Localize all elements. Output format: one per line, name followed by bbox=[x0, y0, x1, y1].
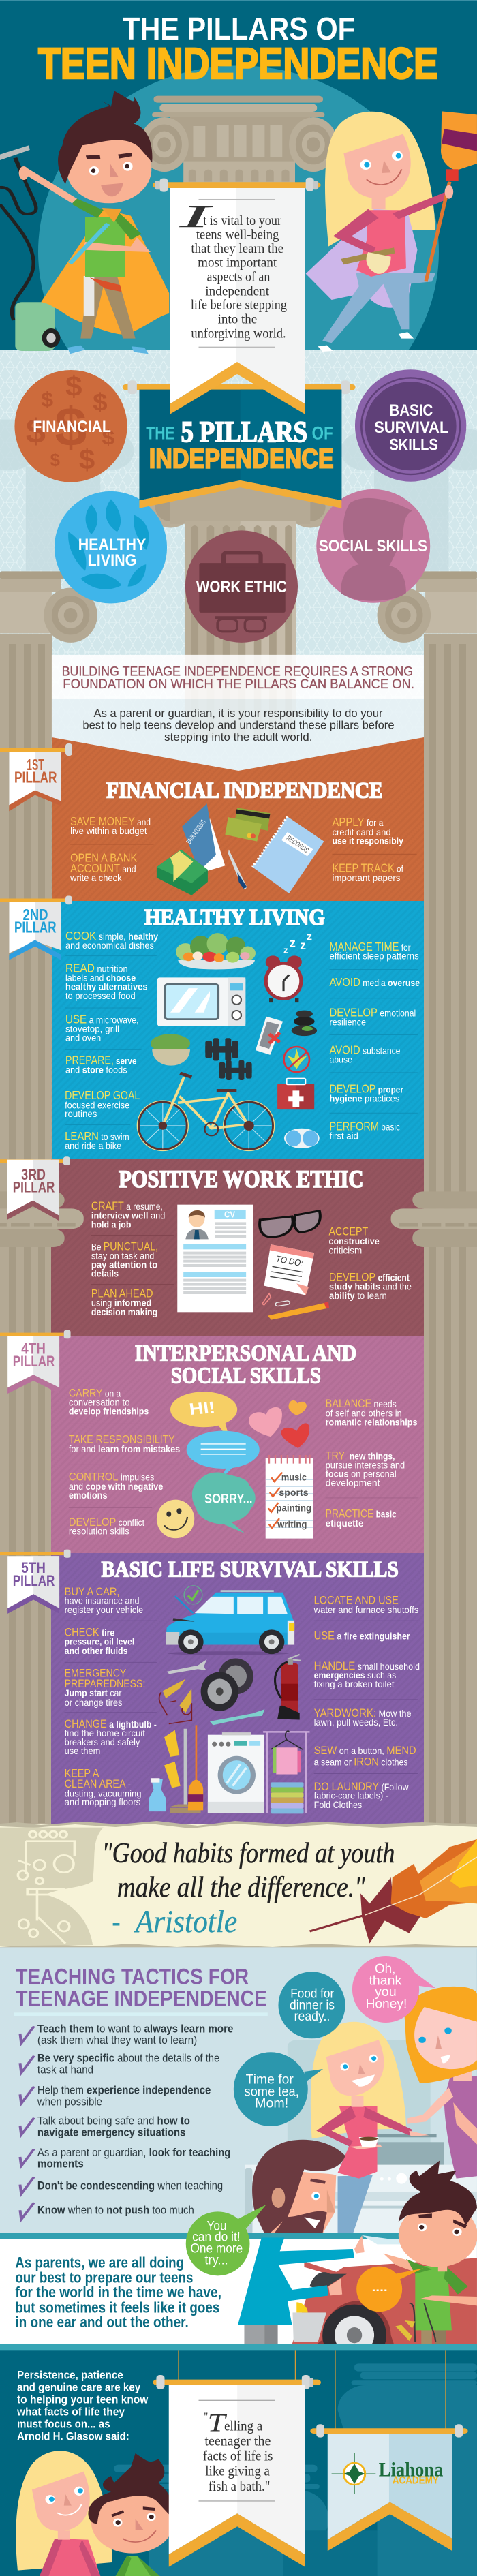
work ethic tips left: hold a job bbox=[91, 1219, 131, 1230]
ribbon: 2nd pillar: 2ND bbox=[22, 906, 48, 924]
pillar circle: financial: FINANCIAL bbox=[33, 418, 111, 436]
survival tips left: PREPAREDNESS: bbox=[65, 1677, 145, 1690]
teaching tactics checklist: Talk about being safe and how to bbox=[37, 2115, 190, 2128]
work ethic tips right: constructive bbox=[329, 1236, 380, 1246]
pillar circle: healthy living: HEALTHY bbox=[78, 536, 146, 554]
speech bubble: you can do it: can do it! bbox=[192, 2229, 241, 2244]
illustration: glasses, to-do note, clips, pencil bbox=[260, 1211, 329, 1320]
survival tips right: emergencies such as bbox=[314, 1670, 396, 1681]
healthy living tips left: and economical dishes bbox=[65, 940, 154, 951]
survival tips left: CHANGE a lightbulb - bbox=[65, 1717, 157, 1730]
banner: the 5 pillars of independence: OF bbox=[312, 423, 333, 444]
work ethic tips right: ACCEPT bbox=[329, 1225, 368, 1238]
healthy living tips right bbox=[329, 940, 420, 1141]
illustration: interests checklist: writing bbox=[277, 1519, 307, 1530]
social tips right: pursue interests and bbox=[326, 1460, 405, 1471]
character: mother bbox=[405, 1987, 477, 2179]
survival tips left: EMERGENCY bbox=[65, 1667, 126, 1679]
speech bubbles: some tea, bbox=[244, 2084, 299, 2099]
speech bubble: you can do it: One more bbox=[190, 2241, 243, 2256]
text: persistence bbox=[16, 2369, 149, 2443]
banner: Arnold Glasow quote: T bbox=[207, 2409, 227, 2437]
text: persistence: to helping your teen know bbox=[17, 2393, 149, 2406]
healthy living tips left: routines bbox=[65, 1109, 97, 1120]
illustration: first aid kit and goggles bbox=[277, 1079, 320, 1148]
title: THE PILLARS OF bbox=[123, 11, 355, 46]
social tips right: development bbox=[326, 1477, 380, 1488]
social tips right: focus on personal bbox=[326, 1469, 397, 1479]
healthy living tips right: MANAGE TIME for bbox=[329, 940, 411, 953]
financial tips left: SAVE MONEY and bbox=[70, 814, 151, 828]
text: persistence: Arnold H. Glasow said: bbox=[17, 2430, 129, 2443]
intro scroll banner with text: unforgiving world. bbox=[191, 326, 286, 341]
illustration: phone, stones, no drugs sign bbox=[256, 1011, 317, 1072]
survival tips left: CHECK tire bbox=[65, 1625, 114, 1638]
heading: interpersonal and social skills: SOCIAL SKILLS bbox=[171, 1362, 321, 1388]
illustration: CV document: CV bbox=[224, 1210, 235, 1220]
social tips right bbox=[326, 1398, 418, 1529]
heading: teaching tactics bbox=[14, 1965, 268, 2016]
ribbon: 4th pillar: 4TH bbox=[21, 1340, 46, 1358]
pillar circle: financial: $ bbox=[50, 450, 60, 470]
banner: the 5 pillars of independence: INDEPENDENCE bbox=[149, 444, 334, 474]
pillar circle: social skills: SOCIAL SKILLS bbox=[319, 538, 427, 555]
foundation text block bbox=[52, 655, 424, 785]
top pillar capital bbox=[140, 96, 338, 183]
work ethic tips left bbox=[91, 1200, 174, 1317]
pillar circle: financial: $ bbox=[93, 388, 108, 416]
healthy living tips right: PERFORM basic bbox=[329, 1120, 400, 1133]
financial tips right: credit card and bbox=[332, 827, 391, 838]
faded background columns bbox=[0, 420, 477, 571]
illustration: alarm clock and sleep z's: z bbox=[300, 938, 306, 952]
quote: Aristotle: make all the difference." bbox=[117, 1872, 365, 1903]
ribbon: 5th pillar: PILLAR bbox=[13, 1572, 55, 1589]
speech bubbles: you bbox=[375, 1984, 397, 1999]
survival tips right: water and furnace shutoffs bbox=[313, 1606, 418, 1616]
pillar circle: basic survival skills bbox=[355, 369, 466, 482]
illustration: speech bubbles and smiley: HI! bbox=[188, 1398, 217, 1419]
survival tips right: USE a fire extinguisher bbox=[314, 1629, 410, 1642]
illustration: alarm clock and sleep z's: z bbox=[283, 946, 288, 955]
social tips left: for and learn from mistakes bbox=[69, 1443, 180, 1454]
character: boy with vacuum and cape bbox=[0, 91, 169, 354]
teaching tactics checklist: (ask them what they want to learn) bbox=[37, 2034, 197, 2046]
survival tips left: or change tires bbox=[65, 1698, 123, 1708]
illustration: microwave bbox=[157, 977, 245, 1026]
ribbon: 5th pillar: 5TH bbox=[21, 1560, 46, 1577]
heading: positive work ethic: POSITIVE WORK ETHIC bbox=[119, 1166, 363, 1193]
illustration: alarm clock and sleep z's bbox=[264, 931, 312, 1002]
intro scroll banner with text: life before stepping bbox=[191, 297, 287, 312]
social tips right: romantic relationships bbox=[326, 1417, 417, 1428]
social tips right: BALANCE needs bbox=[326, 1398, 397, 1410]
speech bubbles: Food for bbox=[290, 1986, 334, 2001]
banner: Arnold Glasow quote bbox=[153, 2350, 321, 2567]
character: father bbox=[252, 2140, 345, 2234]
speech bubble: you can do it: try... bbox=[204, 2252, 228, 2267]
center pillar bbox=[148, 480, 333, 738]
healthy living tips left: stovetop, grill bbox=[65, 1024, 119, 1034]
pillar circle: basic survival skills: BASIC bbox=[389, 402, 433, 419]
teaching tactics checklist: As a parent or guardian, look for teaching bbox=[37, 2147, 230, 2159]
work ethic tips left: stay on task and bbox=[91, 1251, 154, 1261]
social tips left: TAKE RESPONSIBILITY bbox=[69, 1433, 175, 1446]
intro scroll banner with text: into the bbox=[218, 311, 257, 326]
survival tips right: fixing a broken toilet bbox=[314, 1680, 395, 1690]
heading: financial independence: FINANCIAL INDEPENDENCE bbox=[106, 778, 383, 803]
teaching tactics checklist: moments bbox=[37, 2158, 84, 2171]
illustration: interests checklist: sports bbox=[279, 1487, 309, 1498]
illustration: red car with boy and father bbox=[238, 2235, 477, 2366]
healthy living tips right: first aid bbox=[329, 1131, 358, 1141]
foundation text block: As a parent or guardian, it is your responsibility to do your bbox=[93, 707, 383, 720]
pillar circle: financial: $ bbox=[79, 444, 95, 476]
character: girl with broom and oven mitt bbox=[306, 111, 477, 352]
healthy living tips left: to processed food bbox=[65, 991, 136, 1002]
intro scroll banner with text bbox=[170, 188, 305, 414]
work ethic tips left: decision making bbox=[91, 1306, 157, 1317]
illustration: speech bubbles and smiley bbox=[157, 1392, 260, 1538]
pillar circle: healthy living bbox=[55, 491, 167, 603]
survival tips right: HANDLE small household bbox=[314, 1659, 420, 1672]
pillar circle: healthy living: LIVING bbox=[88, 552, 136, 570]
text: as parents: for the world in the time we have, bbox=[15, 2284, 221, 2301]
text: as parents bbox=[15, 2254, 221, 2331]
survival tips right: YARDWORK: Mow the bbox=[314, 1706, 412, 1719]
title bbox=[38, 11, 438, 88]
speech bubbles: Time for bbox=[246, 2072, 294, 2087]
ribbon: 5th pillar bbox=[0, 1550, 71, 1614]
survival tips left: and other fluids bbox=[65, 1646, 128, 1656]
pillar circle: basic survival skills: SKILLS bbox=[389, 436, 438, 454]
work ethic tips left: CRAFT a resume, bbox=[91, 1200, 163, 1212]
teaching tactics checklist bbox=[20, 2023, 233, 2220]
heading: healthy living: HEALTHY LIVING bbox=[144, 904, 325, 930]
icon: head silhouette with gears bbox=[0, 1828, 104, 1946]
healthy living tips left: and oven bbox=[65, 1032, 101, 1043]
teaching tactics checklist: navigate emergency situations bbox=[37, 2126, 185, 2139]
social tips right: TRY new things, bbox=[326, 1450, 395, 1462]
work ethic tips left: interview well and bbox=[91, 1210, 165, 1221]
healthy living tips left: PREPARE, serve bbox=[65, 1054, 136, 1067]
social tips left: resolution skills bbox=[69, 1526, 129, 1537]
banner: Arnold Glasow quote: elling a bbox=[224, 2419, 262, 2434]
ribbon: 4th pillar bbox=[0, 1330, 71, 1394]
healthy living tips right: efficient sleep patterns bbox=[329, 951, 419, 962]
speech bubbles bbox=[234, 1956, 435, 2126]
healthy living tips left bbox=[65, 929, 159, 1152]
work ethic tips right bbox=[329, 1225, 412, 1301]
healthy living tips left: COOK simple, healthy bbox=[65, 929, 159, 942]
healthy living tips left: READ nutrition bbox=[65, 961, 127, 975]
healthy living tips left: healthy alternatives bbox=[65, 981, 148, 992]
foundation text block: FOUNDATION ON WHICH THE PILLARS CAN BALANCE ON. bbox=[63, 677, 414, 691]
top scroll rod bbox=[153, 178, 321, 192]
pillar circle: work ethic: WORK ETHIC bbox=[196, 579, 287, 596]
financial tips right: use it responsibly bbox=[332, 835, 403, 846]
quote: Aristotle: Aristotle bbox=[133, 1904, 237, 1939]
healthy living tips left: LEARN to swim bbox=[65, 1129, 129, 1143]
text: persistence: and genuine care are key bbox=[17, 2381, 141, 2394]
illustration: red car with boy and father: .... bbox=[372, 2282, 388, 2294]
teaching tactics checklist: Teach them to want to always learn more bbox=[37, 2023, 233, 2036]
text: as parents: but sometimes it feels like it goes bbox=[15, 2299, 219, 2316]
financial tips right bbox=[332, 815, 417, 884]
intro scroll banner with text: most important bbox=[198, 256, 277, 271]
healthy living tips right: AVOID substance bbox=[329, 1043, 400, 1056]
illustration: bank book, cash, cards, records bbox=[157, 803, 324, 895]
survival tips right bbox=[313, 1594, 420, 1810]
illustration: alarm clock and sleep z's: z bbox=[307, 931, 312, 942]
third pillar capital overlays bbox=[0, 1191, 477, 1247]
quote: Aristotle bbox=[102, 1838, 395, 1939]
work ethic tips left: pay attention to bbox=[91, 1259, 157, 1270]
survival tips left: register your vehicle bbox=[65, 1606, 143, 1616]
teaching tactics checklist: Help them experience independence bbox=[37, 2084, 211, 2097]
social tips left: develop friendships bbox=[69, 1406, 149, 1417]
banner: Arnold Glasow quote: facts of life is bbox=[203, 2449, 273, 2464]
social tips left: emotions bbox=[69, 1490, 108, 1501]
banner: Liahona Academy logo bbox=[310, 2350, 468, 2551]
survival tips right: a seam or IRON clothes bbox=[314, 1755, 408, 1768]
foundation text block: stepping into the adult world. bbox=[164, 731, 312, 743]
survival tips right: SEW on a button, MEND bbox=[314, 1744, 416, 1757]
speech bubble: you can do it: You bbox=[207, 2218, 227, 2233]
text: persistence: must focus on... as bbox=[17, 2418, 110, 2431]
speech bubble: you can do it bbox=[186, 2205, 266, 2275]
illustration: car with raised hood bbox=[166, 1586, 294, 1655]
illustration: interests checklist: painting bbox=[276, 1503, 311, 1514]
survival tips left: and mopping floors bbox=[65, 1798, 140, 1808]
illustration: salad bowl and dumbbells bbox=[151, 1034, 252, 1080]
pillar circle: financial: $ bbox=[65, 370, 82, 402]
speech bubbles: Mom! bbox=[255, 2096, 288, 2111]
work ethic tips right: DEVELOP efficient bbox=[329, 1271, 410, 1284]
teaching tactics checklist: task at hand bbox=[37, 2064, 93, 2076]
text: as parents: As parents, we are all doing bbox=[15, 2254, 184, 2271]
illustration: bank book, cash, cards, records: RECORDS bbox=[285, 835, 310, 855]
pillar circle: financial: $ bbox=[41, 388, 54, 412]
healthy living tips right: AVOID media overuse bbox=[329, 975, 420, 989]
financial tips right: APPLY for a bbox=[332, 815, 384, 829]
survival tips left bbox=[65, 1585, 157, 1808]
text: as parents: in one ear and out the other. bbox=[15, 2314, 189, 2331]
pillar circle: financial: $ bbox=[102, 426, 115, 449]
intro scroll banner with text: independent bbox=[205, 283, 269, 298]
survival tips left: dusting, vacuuming bbox=[65, 1789, 142, 1799]
financial tips left bbox=[70, 814, 153, 884]
speech bubbles: dinner is bbox=[290, 1997, 335, 2012]
pillar circle: social skills bbox=[316, 489, 430, 603]
work ethic tips right: study habits and the bbox=[329, 1281, 412, 1292]
ribbon: 2nd pillar: PILLAR bbox=[14, 919, 57, 936]
footer background bbox=[0, 2344, 477, 2576]
banner: Liahona Academy logo: Liahona bbox=[379, 2459, 443, 2481]
survival tips left: use them bbox=[65, 1747, 100, 1757]
teaching section background with kitchen bbox=[0, 1947, 477, 2234]
banner: Arnold Glasow quote: " bbox=[204, 2410, 208, 2423]
healthy living tips right: hygiene practices bbox=[329, 1093, 399, 1104]
healthy living tips left: DEVELOP GOAL bbox=[65, 1088, 140, 1102]
survival tips left: BUY A CAR, bbox=[65, 1585, 119, 1598]
patterned background bbox=[0, 350, 477, 1828]
teaching tactics checklist: Don't be condescending when teaching bbox=[37, 2179, 223, 2192]
illustration: bank book, cash, cards, records: BANK ACCOUNT bbox=[185, 818, 208, 845]
foundation text block: best to help teens develop and understand these pillars before bbox=[82, 719, 395, 731]
pillar circle: work ethic bbox=[185, 530, 298, 643]
healthy living tips left: USE a microwave, bbox=[65, 1013, 139, 1026]
financial tips left: write a check bbox=[70, 873, 122, 884]
survival tips left: KEEP A bbox=[65, 1766, 99, 1779]
work ethic tips left: details bbox=[91, 1268, 119, 1279]
social tips left: conversation to bbox=[69, 1397, 130, 1408]
illustration: hearts bbox=[249, 1400, 309, 1448]
healthy living tips right: DEVELOP emotional bbox=[329, 1006, 416, 1019]
character: boy head bbox=[399, 2161, 477, 2271]
survival tips left: breakers and safely bbox=[65, 1738, 140, 1748]
character: daughter with teacup bbox=[311, 2022, 429, 2234]
banner: Arnold Glasow quote: teenager the bbox=[204, 2434, 271, 2449]
ribbon: 1st pillar: PILLAR bbox=[14, 769, 57, 786]
social tips left: and cope with negative bbox=[69, 1481, 163, 1492]
heading: teaching tactics: TEACHING TACTICS FOR bbox=[16, 1965, 249, 1989]
work ethic tips left: PLAN AHEAD bbox=[91, 1287, 153, 1300]
intro scroll banner with text: aspects of an bbox=[207, 270, 271, 285]
financial tips left: ACCOUNT and bbox=[70, 861, 136, 875]
teaching tactics checklist: Know when to not push too much bbox=[37, 2204, 194, 2217]
survival tips right: Fold Clothes bbox=[314, 1800, 362, 1810]
financial tips right: KEEP TRACK of bbox=[332, 861, 404, 874]
ribbon: 4th pillar: PILLAR bbox=[13, 1353, 55, 1370]
ribbon: 1st pillar bbox=[0, 743, 72, 811]
social tips left: CONTROL impulses bbox=[69, 1471, 154, 1484]
social tips left: DEVELOP conflict bbox=[69, 1516, 144, 1529]
teaching tactics checklist: when possible bbox=[37, 2096, 102, 2109]
heading: interpersonal and social skills: INTERPERSONAL AND bbox=[135, 1340, 356, 1366]
healthy living tips right: abuse bbox=[329, 1054, 352, 1065]
intro scroll banner with text: that they learn the bbox=[191, 241, 283, 256]
text: persistence: what facts of life they bbox=[16, 2406, 125, 2419]
banner: Liahona Academy logo: ACADEMY bbox=[393, 2474, 439, 2486]
heading: teaching tactics: TEENAGE INDEPENDENCE bbox=[16, 1987, 267, 2011]
banner: the 5 pillars of independence: THE bbox=[146, 423, 175, 444]
healthy living tips left: labels and choose bbox=[65, 972, 136, 983]
speech bubbles: ready.. bbox=[294, 2008, 330, 2023]
financial tips right: important papers bbox=[332, 873, 401, 884]
work ethic tips right: criticism bbox=[329, 1245, 362, 1256]
pillar circle: financial bbox=[14, 370, 127, 482]
survival tips left: pressure, oil level bbox=[65, 1637, 134, 1647]
financial tips left: live within a budget bbox=[70, 826, 147, 837]
healthy living tips right: resilience bbox=[329, 1017, 366, 1028]
ribbon: 1st pillar: 1ST bbox=[27, 756, 44, 774]
pillar circle: financial: $ bbox=[55, 396, 87, 457]
healthy living tips left: and ride a bike bbox=[65, 1141, 121, 1152]
survival tips right: lawn, pull weeds, Etc. bbox=[314, 1718, 398, 1728]
pillar circle: basic survival skills: SURVIVAL bbox=[374, 419, 448, 436]
pillar circle: financial: $ bbox=[26, 413, 46, 450]
social tips right: PRACTICE basic bbox=[326, 1507, 397, 1520]
work ethic tips left: Be PUNCTUAL, bbox=[91, 1240, 158, 1253]
intro scroll banner with text: teens well-being bbox=[196, 228, 279, 243]
survival tips left: CLEAN AREA - bbox=[65, 1777, 131, 1790]
speech bubbles: thank bbox=[369, 1973, 402, 1988]
section strips and white band bbox=[0, 2233, 477, 2344]
heading: interpersonal and social skills bbox=[135, 1340, 356, 1388]
work ethic tips right: ability to learn bbox=[329, 1290, 387, 1301]
ribbon: 3rd pillar: 3RD bbox=[21, 1166, 46, 1183]
illustration: washing machine, rack, cleaning tools bbox=[149, 1725, 309, 1813]
illustration: bicycle bbox=[137, 1073, 275, 1151]
ribbon: 3rd pillar bbox=[0, 1156, 70, 1221]
illustration: alarm clock and sleep z's: z bbox=[290, 936, 296, 949]
ribbon: 3rd pillar: PILLAR bbox=[13, 1178, 55, 1195]
side pillars bbox=[0, 571, 477, 1826]
speech bubbles: Oh, bbox=[375, 1961, 395, 1976]
work ethic tips left: using informed bbox=[91, 1298, 151, 1308]
illustration: tools, tires, jumper cables, extinguisher bbox=[159, 1655, 301, 1725]
social tips right: etiquette bbox=[326, 1518, 363, 1529]
healthy living tips left: focused exercise bbox=[65, 1100, 129, 1111]
illustration: salad plate bbox=[176, 933, 256, 969]
characters: girl and boy bbox=[16, 2451, 174, 2576]
intro scroll banner with text: t is vital to your bbox=[203, 213, 281, 228]
banner: Arnold Glasow quote: fish a bath." bbox=[209, 2479, 270, 2494]
social tips left bbox=[69, 1387, 180, 1537]
illustration: glasses, to-do note, clips, pencil: TO DO: bbox=[275, 1254, 305, 1269]
survival tips right: DO LAUNDRY (Follow bbox=[314, 1780, 409, 1793]
header background with arch bbox=[0, 0, 477, 350]
illustration: CV document bbox=[177, 1205, 253, 1312]
quote: Aristotle: - bbox=[112, 1904, 121, 1939]
illustration: feather quill bbox=[309, 1839, 477, 1944]
survival tips left: find the home circuit bbox=[65, 1729, 145, 1739]
illustration: speech bubbles and smiley: SORRY... bbox=[204, 1491, 253, 1506]
survival tips left: have insurance and bbox=[65, 1596, 139, 1606]
ribbon: 2nd pillar bbox=[0, 896, 72, 960]
banner: the 5 pillars of independence: 5 PILLARS bbox=[181, 416, 307, 448]
text: persistence: Persistence, patience bbox=[17, 2369, 123, 2382]
illustration: interests checklist: music bbox=[281, 1472, 307, 1483]
financial tips left: OPEN A BANK bbox=[70, 850, 138, 864]
intro scroll banner with text: I bbox=[178, 199, 214, 234]
social tips left: CARRY on a bbox=[69, 1387, 121, 1400]
banner: the 5 pillars of independence bbox=[123, 380, 355, 508]
teaching tactics checklist: Be very specific about the details of the bbox=[37, 2052, 219, 2065]
illustration: interests checklist bbox=[266, 1455, 313, 1539]
panel backgrounds bbox=[51, 737, 424, 1826]
survival tips right: LOCATE AND USE bbox=[314, 1594, 399, 1606]
healthy living tips right: DEVELOP proper bbox=[329, 1082, 403, 1095]
paper quote background bbox=[0, 1821, 477, 1949]
text: as parents: our best to prepare our teens bbox=[15, 2269, 193, 2286]
speech bubbles: Honey! bbox=[366, 1996, 407, 2011]
healthy living tips left: and store foods bbox=[65, 1065, 127, 1075]
survival tips right: fabric-care labels) - bbox=[314, 1791, 388, 1801]
social tips right: of self and others in bbox=[326, 1408, 402, 1419]
survival tips left: Jump start car bbox=[65, 1689, 122, 1699]
banner: Arnold Glasow quote: like giving a bbox=[205, 2464, 270, 2479]
